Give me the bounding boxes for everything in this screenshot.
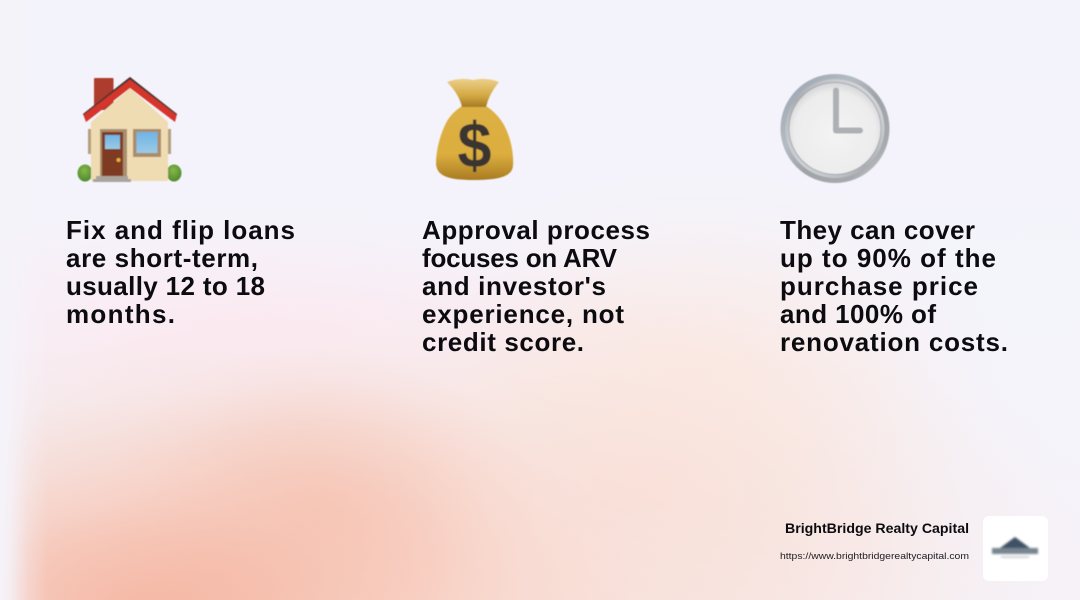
icon part: right bush [166, 164, 182, 182]
icon part: roof [83, 77, 177, 122]
company url: https://www.brightbridgerealtycapital.com [780, 551, 969, 562]
text block: loan term: Fix and flip loans [66, 215, 295, 245]
icon part: steps [93, 176, 131, 182]
icon part: dollar sign: $ [458, 109, 492, 181]
text block: coverage [780, 215, 1008, 357]
text block: approval process: focuses on ARV [422, 243, 618, 273]
icon: money bag [436, 79, 513, 181]
icon part: face [790, 83, 880, 174]
text block: loan term: months. [66, 299, 175, 329]
text block: coverage: renovation costs. [780, 327, 1008, 357]
logo card [983, 516, 1048, 581]
text block: approval process: credit score. [422, 327, 584, 357]
icon part: side shutters [88, 129, 171, 154]
text block: loan term: are short-term, [66, 243, 258, 273]
icon part: door [100, 129, 127, 176]
icon part: bag neck [447, 79, 499, 107]
text block: approval process [422, 215, 650, 357]
icon part: wall [91, 88, 168, 181]
icon part: bezel [780, 74, 890, 183]
icon part: chimney [94, 78, 114, 110]
text block: coverage: up to 90% of the [780, 243, 996, 273]
company name: BrightBridge Realty Capital [785, 521, 969, 536]
text block: approval process: experience, not [422, 299, 624, 329]
icon: clock [780, 74, 890, 183]
icon: house [78, 77, 182, 182]
text block: coverage: purchase price [780, 271, 978, 301]
icon part: left bush [78, 164, 92, 182]
text block: loan term [66, 215, 295, 329]
text block: coverage: They can cover [780, 215, 975, 245]
text block: approval process: and investor's [422, 271, 606, 301]
icon: logo mark [992, 537, 1038, 558]
icon part: hands [836, 90, 860, 130]
text block: approval process: Approval process [422, 215, 650, 245]
text block: loan term: usually 12 to 18 [66, 271, 265, 301]
icon part: bag body [436, 106, 513, 180]
text block: coverage: and 100% of [780, 299, 936, 329]
icon part: window [133, 129, 161, 157]
